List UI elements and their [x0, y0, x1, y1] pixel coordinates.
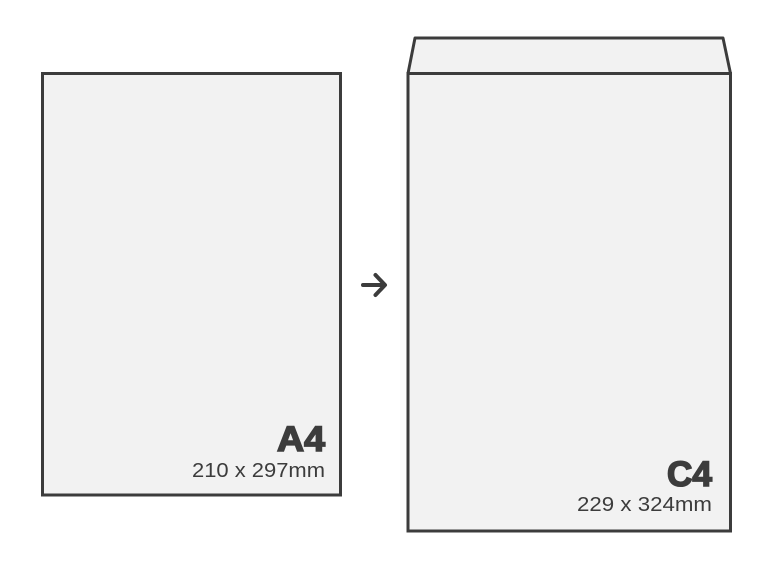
- heading: C4: C4: [667, 455, 713, 494]
- heading: A4: A4: [277, 420, 326, 459]
- text: A4 dimensions: 210 x 297mm: [192, 459, 325, 482]
- panel: A4 sheet: [42, 74, 340, 495]
- panel: C4 envelope: [408, 38, 730, 531]
- envelope body: [408, 74, 730, 531]
- text: C4 dimensions: 229 x 324mm: [577, 493, 712, 516]
- envelope flap: [408, 38, 730, 74]
- arrow: A4 to C4: [363, 275, 385, 295]
